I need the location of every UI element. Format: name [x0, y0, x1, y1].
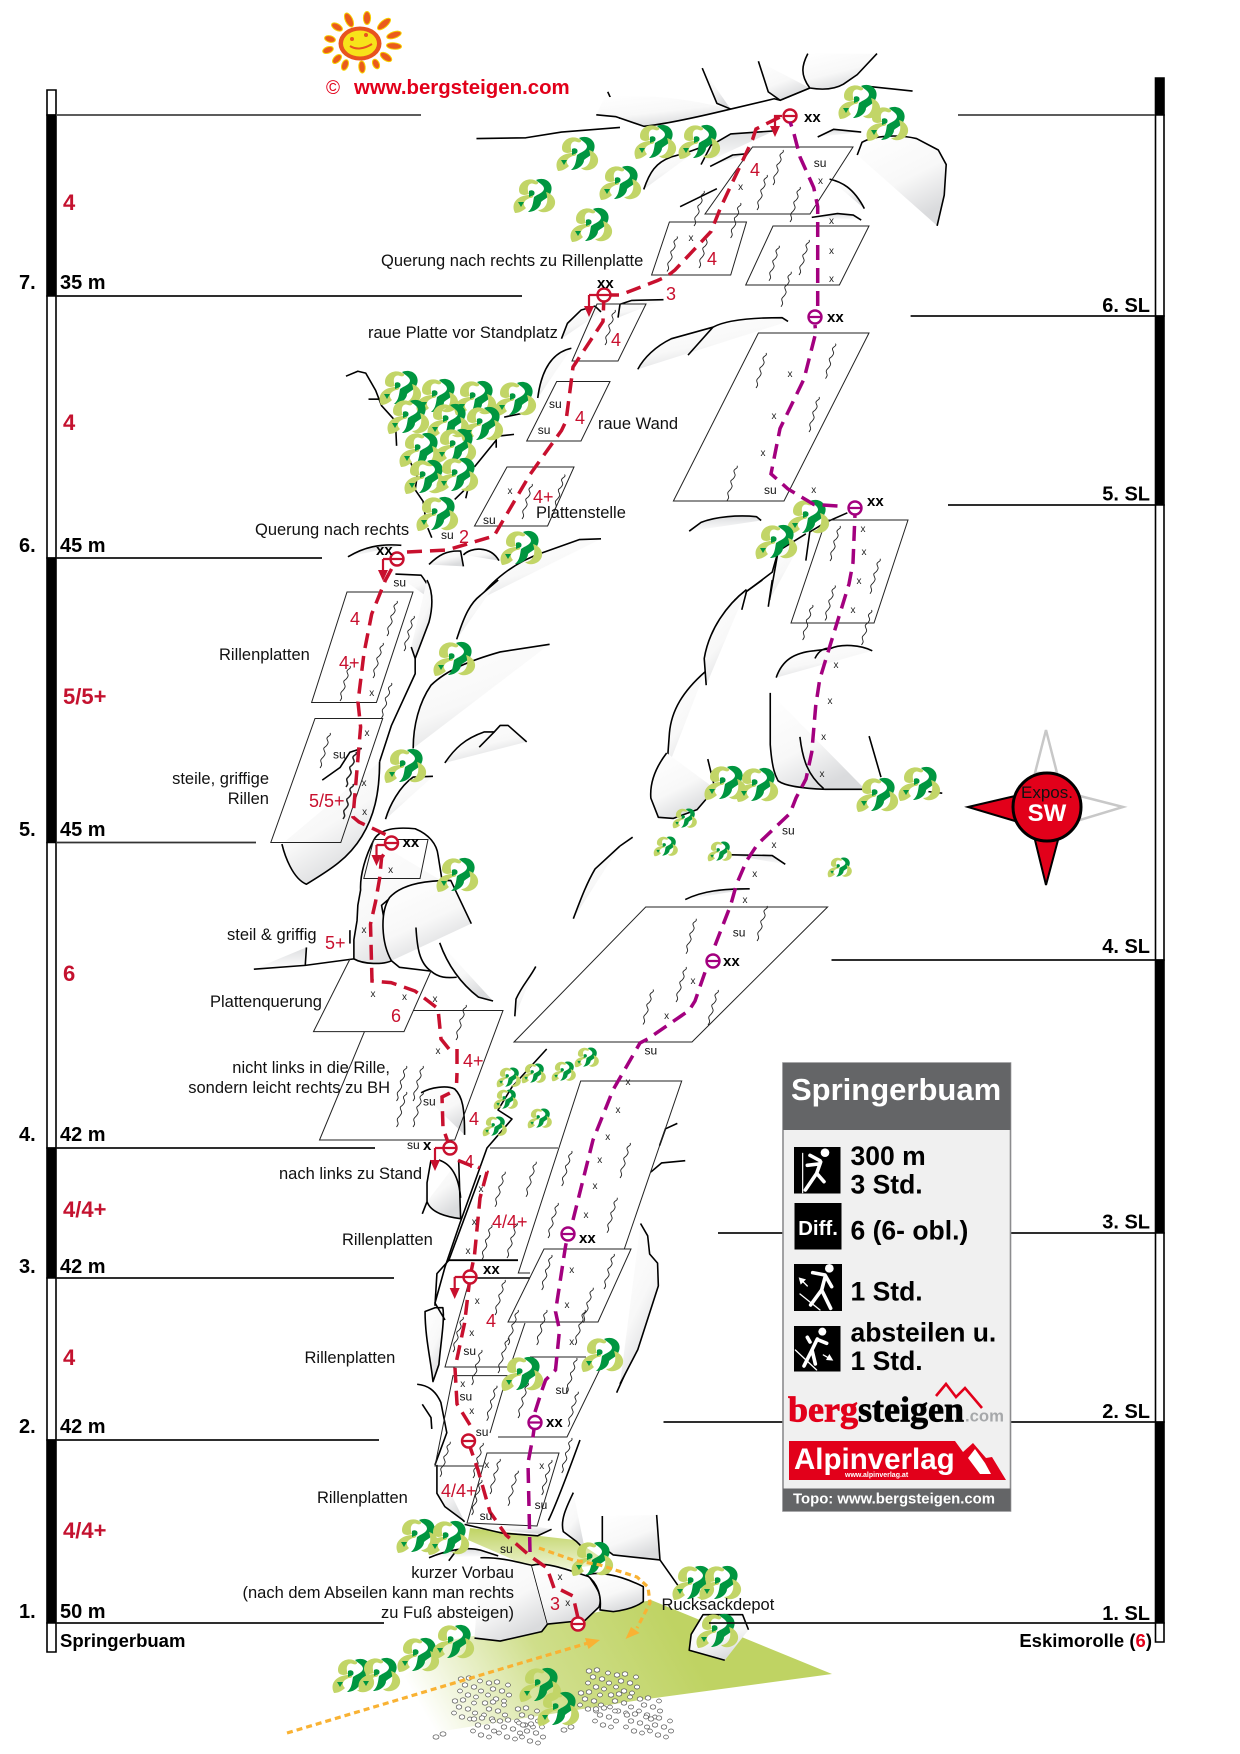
annotation: nicht links in die Rille: [188, 1059, 390, 1097]
icon: descent hiker: [794, 1326, 840, 1372]
right pitch labels: 3. SL: [1102, 1212, 1150, 1234]
bergsteigen.com logo: bergsteigen: [788, 1390, 964, 1430]
right pitch labels: 1. SL: [1102, 1603, 1150, 1625]
left pitch numbers and lengths: 2.: [19, 1416, 36, 1438]
belay markers xx: xx: [546, 1414, 563, 1431]
su markers: su: [733, 926, 745, 940]
rock formations: lower section: [417, 1160, 600, 1641]
annotation: Querung nach rechts: Querung nach rechts: [255, 521, 409, 539]
route grades on topo: 4: [469, 1109, 479, 1129]
left pitch numbers and lengths: 6.: [19, 535, 36, 557]
left pitch numbers and lengths: 42 m: [60, 1256, 106, 1278]
x bolt markers: x: [752, 869, 757, 880]
icon: difficulty: [794, 1203, 842, 1250]
annotation: Plattenstelle: Plattenstelle: [536, 504, 626, 522]
x bolt markers: x: [597, 1155, 602, 1166]
su markers: su: [423, 1094, 436, 1108]
route grades on topo: 3: [550, 1594, 560, 1614]
red route belays: [372, 110, 797, 1630]
route grades on topo: 3: [666, 284, 676, 304]
x bolt markers: x: [772, 411, 776, 422]
right pitch labels: 2. SL: [1102, 1401, 1150, 1423]
belay markers xx: xx: [579, 1230, 596, 1247]
orange approach and descent arrows: [287, 1548, 650, 1733]
x bolt markers: x: [370, 989, 376, 1000]
x bolt markers: x: [569, 1265, 574, 1276]
info panel: [783, 1063, 1010, 1511]
route grades on topo: 4+: [533, 487, 554, 507]
route grades on topo: 6: [391, 1006, 401, 1026]
x bolt markers: x: [472, 1217, 477, 1228]
left pitch numbers and lengths: 1.: [19, 1601, 36, 1623]
belay markers xx: xx: [827, 309, 844, 326]
right pitch scale bar: [1156, 78, 1164, 1642]
annotation: steil und griffig: steil & griffig: [227, 926, 317, 944]
su markers: su: [814, 156, 826, 170]
left pitch numbers and lengths: 4.: [19, 1124, 36, 1146]
rock: upper slab lines: [435, 1049, 547, 1320]
Alpinverlag logo: [789, 1441, 1006, 1480]
x bolt markers: x: [362, 925, 366, 936]
su markers: su: [476, 1425, 488, 1439]
x bolt markers: x: [478, 1184, 484, 1195]
annotation: Rillenplatten: Rillenplatten: [342, 1231, 433, 1249]
x bolt markers: x: [828, 696, 832, 707]
left route name: Springerbuam: [60, 1630, 185, 1651]
su markers: su: [463, 1344, 476, 1358]
panel footer: Topo: www.bergsteigen.com: [793, 1490, 995, 1508]
su markers: su: [460, 1390, 472, 1404]
route grades on topo: 2: [459, 527, 469, 547]
rock formations: upper left: [346, 92, 620, 600]
su markers: su: [764, 483, 777, 497]
annotation: kurzer Vorbau: [242, 1564, 514, 1622]
x bolt markers: x: [466, 1246, 470, 1257]
x bolt markers: x: [364, 728, 370, 739]
annotation: Rillenplatten: Rillenplatten: [304, 1349, 395, 1367]
x bolt markers: x: [558, 1572, 562, 1583]
belay markers xx: xx: [867, 493, 884, 510]
route grades on topo: 4: [575, 408, 585, 428]
annotation: nicht links in die Rille: nicht links in die Rille,: [232, 1059, 390, 1077]
Alpinverlag logo: www.alpinverlag.at: [844, 1472, 909, 1479]
x bolt markers: x: [584, 1210, 588, 1221]
su markers: su: [480, 1509, 492, 1523]
x bolt markers: x: [388, 865, 393, 876]
x bolt markers: x: [834, 660, 838, 671]
route: Springerbuam (red dashed): [353, 116, 782, 1618]
bergsteigen.com logo: .com: [965, 1406, 1004, 1426]
left pitch numbers and lengths: 42 m: [60, 1124, 106, 1146]
right pitch labels: 5. SL: [1102, 484, 1150, 506]
annotation: Querung nach rechts zu Rillenplatte: Querung nach rechts zu Rillenplatte: [381, 252, 643, 270]
x bolt markers: x: [432, 994, 438, 1005]
left pitch numbers and lengths: 42 m: [60, 1416, 106, 1438]
left pitch grades: [63, 190, 106, 1543]
length and time: 300 m: [850, 1141, 926, 1171]
annotation: kurzer Vorbau: kurzer Vorbau: [411, 1564, 514, 1582]
x bolt markers: x: [605, 1132, 610, 1143]
left pitch grades: 4: [63, 410, 76, 435]
compass: exposition SW: SW: [1028, 800, 1067, 827]
left pitch grades: 6: [63, 961, 75, 986]
belay markers xx: xx: [376, 542, 393, 559]
x bolt markers: x: [850, 605, 856, 616]
su markers: [333, 156, 826, 1556]
left pitch grades: 4/4+: [63, 1518, 106, 1543]
annotation: Rillenplatten: Rillenplatten: [219, 646, 310, 664]
belay markers xx: xx: [804, 109, 821, 126]
belay markers xx: [376, 109, 884, 1431]
x bolt markers: x: [402, 992, 407, 1003]
rock formations: right shoulder: [620, 1123, 749, 1660]
route grades on topo: 4: [611, 330, 621, 350]
left pitch numbers and lengths: 7.: [19, 272, 36, 294]
belay markers xx: x: [423, 1137, 432, 1154]
su markers: su: [393, 576, 406, 590]
x bolt markers: x: [738, 182, 743, 193]
x bolt markers: x: [829, 216, 834, 227]
su markers: su: [782, 824, 795, 838]
su markers: su: [538, 423, 550, 437]
rock formations: upper right: [596, 54, 946, 600]
x bolt markers: x: [592, 1181, 598, 1192]
x bolt markers: x: [820, 769, 824, 780]
x bolt markers: x: [760, 448, 766, 459]
right pitch labels: [1102, 295, 1150, 1625]
x bolt markers: x: [564, 1300, 570, 1311]
scree pebbles: [433, 1668, 674, 1745]
su markers: su: [644, 1044, 657, 1058]
x bolt markers: x: [469, 1328, 474, 1339]
annotation: Rucksackdepot: Rucksackdepot: [662, 1596, 775, 1614]
panel footer: [783, 1488, 1010, 1511]
x bolt markers: x: [469, 1406, 474, 1417]
route grades on topo: 4/4+: [492, 1212, 528, 1232]
panel header: [783, 1063, 1010, 1130]
x bolt markers: x: [539, 1461, 544, 1472]
x bolt markers: x: [690, 976, 696, 987]
belay markers xx: xx: [597, 275, 614, 292]
route grades on topo: 5/5+: [309, 791, 345, 811]
annotation: raue Platte vor Standplatz: raue Platte vor Standplatz: [368, 324, 558, 342]
route grades on topo: 4: [750, 160, 760, 180]
compass: exposition SW: Expos.: [1021, 783, 1073, 802]
su markers: su: [407, 1138, 420, 1152]
right pitch labels: 4. SL: [1102, 936, 1150, 958]
x bolt markers: x: [616, 1105, 620, 1116]
length and time: 3 Std.: [850, 1170, 923, 1200]
left pitch grades: 4: [63, 1345, 76, 1370]
left pitch lines: [56, 115, 522, 1623]
rock formations: middle left: [254, 580, 620, 1135]
annotation: steile, griffige Rillen: Rillen: [228, 790, 269, 808]
su markers: su: [500, 1542, 513, 1556]
x bolt markers: x: [788, 369, 792, 380]
left pitch numbers and lengths: 35 m: [60, 272, 106, 294]
route grades on topo: 4+: [463, 1051, 484, 1071]
su markers: su: [535, 1498, 547, 1512]
left pitch numbers and lengths: 45 m: [60, 819, 106, 841]
shrubs: [333, 85, 940, 1726]
ground: green scree slope: [370, 1528, 832, 1735]
x bolt markers: x: [664, 1011, 669, 1022]
x bolt markers: x: [818, 176, 823, 187]
icon: approach hiker: [794, 1264, 842, 1311]
route grades on topo: 5+: [325, 933, 346, 953]
length and time: [850, 1141, 926, 1200]
annotation: steile, griffige Rillen: [172, 770, 269, 808]
su markers: su: [483, 513, 496, 527]
annotation: Plattenquerung: Plattenquerung: [210, 993, 322, 1011]
left pitch grades: 4: [63, 190, 76, 215]
belay markers xx: xx: [483, 1261, 500, 1278]
su markers: su: [549, 397, 562, 411]
difficulty value: 6 (6- obl.): [850, 1216, 968, 1246]
approach time: 1 Std.: [850, 1276, 923, 1306]
x bolt markers: x: [688, 233, 694, 244]
left pitch numbers and lengths: 50 m: [60, 1601, 106, 1623]
wavy crack symbols: [320, 150, 880, 1515]
compass: exposition SW: [968, 730, 1123, 885]
annotation: nicht links in die Rille: sondern leicht rechts zu BH: [188, 1079, 390, 1097]
panel title: Springerbuam: [791, 1072, 1001, 1107]
x bolt markers: x: [475, 1296, 480, 1307]
x bolt markers: x: [829, 274, 834, 285]
left pitch numbers and lengths: [19, 272, 106, 1623]
x bolt markers: x: [856, 576, 862, 587]
purple route belays: [528, 310, 862, 1429]
right route name: Eskimorolle (6): [1019, 1630, 1152, 1651]
left pitch numbers and lengths: 3.: [19, 1256, 36, 1278]
route: Eskimorolle (purple dashed): [528, 122, 855, 1552]
annotation: steile, griffige Rillen: steile, griffige: [172, 770, 269, 788]
Alpinverlag logo: Alpinverlag: [794, 1443, 955, 1476]
annotation: kurzer Vorbau: zu Fuß absteigen): [381, 1604, 514, 1622]
route grades on topo: 4: [486, 1311, 496, 1331]
x bolt markers: x: [829, 246, 834, 257]
x bolt markers: x: [821, 732, 826, 743]
rock formations: middle right: [620, 580, 942, 900]
x bolt markers: x: [565, 1598, 570, 1609]
route grades on topo: [309, 160, 760, 1614]
rock formations: right base: [548, 1310, 680, 1612]
website credit: ©: [326, 78, 340, 99]
x bolt markers: x: [860, 524, 866, 535]
x bolt markers: x: [508, 486, 512, 497]
left pitch grades: 4/4+: [63, 1197, 106, 1222]
icon: difficulty: Diff.: [798, 1217, 838, 1240]
website credit: www.bergsteigen.com: [353, 77, 570, 99]
belay markers xx: xx: [723, 953, 740, 970]
route grades on topo: 4: [464, 1152, 474, 1172]
icon: climber: [794, 1147, 840, 1194]
route grades on topo: 4: [350, 609, 360, 629]
descent info: 1 Std.: [850, 1346, 923, 1376]
annotation: kurzer Vorbau: (nach dem Abseilen kann man rechts: [242, 1584, 514, 1602]
x bolt markers: x: [862, 547, 866, 558]
x bolt markers: x: [626, 1077, 630, 1088]
belay markers xx: xx: [402, 834, 420, 851]
su markers: su: [556, 1383, 568, 1397]
right pitch lines: [664, 115, 1155, 1623]
climbing slabs: [271, 147, 908, 1526]
right pitch labels: 6. SL: [1102, 295, 1150, 317]
x bolt markers: x: [484, 1460, 489, 1471]
x bolt markers: x: [369, 688, 374, 699]
descent info: absteilen u.: [850, 1318, 996, 1348]
x bolt markers: x: [569, 1337, 574, 1348]
route grades on topo: 4: [707, 249, 717, 269]
x bolt markers: x: [362, 778, 366, 789]
route grades on topo: 4+: [339, 653, 360, 673]
x bolt markers: x: [742, 895, 748, 906]
left pitch scale bar: [47, 90, 56, 1652]
left pitch numbers and lengths: 5.: [19, 819, 36, 841]
left pitch numbers and lengths: 45 m: [60, 535, 106, 557]
annotation: Rillenplatten: Rillenplatten: [317, 1489, 408, 1507]
x bolt markers: x: [436, 1046, 440, 1057]
su markers: su: [333, 748, 346, 762]
annotation: nach links zu Stand: nach links zu Stand: [279, 1165, 422, 1183]
x bolt markers: x: [460, 1379, 465, 1390]
descent info: [850, 1318, 996, 1376]
annotation: raue Wand: raue Wand: [598, 415, 678, 433]
x bolt markers: x: [811, 485, 816, 496]
x bolt markers: [362, 176, 866, 1609]
su markers: su: [441, 528, 454, 542]
x bolt markers: x: [772, 840, 776, 851]
left pitch grades: 5/5+: [63, 684, 106, 709]
x bolt markers: x: [362, 807, 367, 818]
sun logo: [322, 12, 402, 73]
route grades on topo: 4/4+: [441, 1481, 477, 1501]
